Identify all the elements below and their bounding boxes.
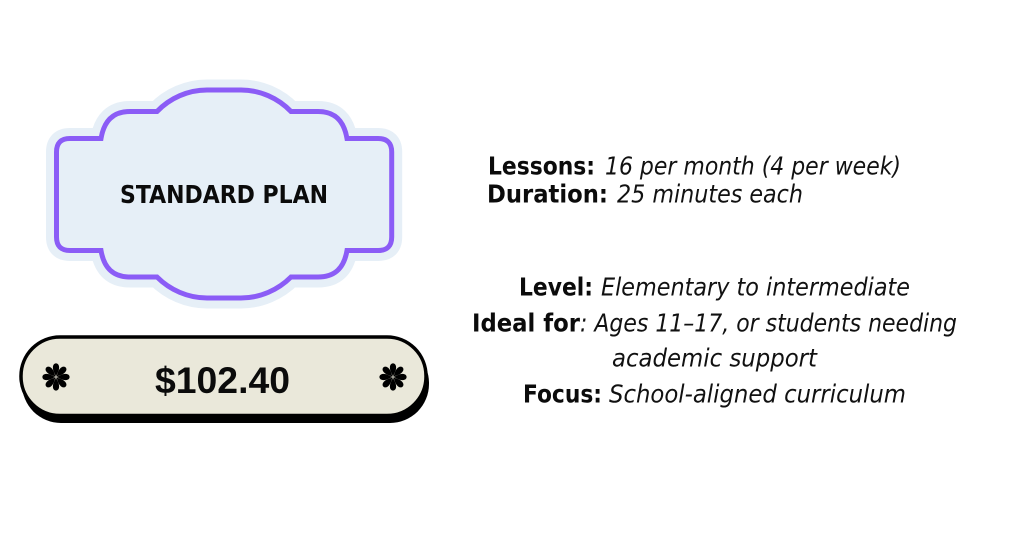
ideal for line: : Ages 11–17, or students needing [580,308,957,338]
price: $102.40 [155,360,290,401]
level line: Elementary to intermediate [601,272,910,302]
lessons line [488,152,901,180]
icon: right flower asterisk [379,363,407,391]
panel: price pill [21,337,429,423]
text block: level, ideal for and focus [472,272,957,408]
lessons line: Lessons: [488,152,595,180]
duration line [487,180,803,208]
panel: plan badge [56,90,392,298]
duration line: Duration: [487,180,608,208]
badge title: STANDARD PLAN [120,180,328,209]
lessons line: 16 per month (4 per week) [605,152,901,180]
focus line: Focus: [523,380,602,408]
badge halo [56,90,392,298]
pill shadow [22,344,429,423]
icon: left flower asterisk [42,363,70,391]
ideal for continuation line: academic support [612,344,818,372]
ideal for line: Ideal for [472,308,581,338]
text block: lessons and duration [487,152,901,208]
badge purple outline [56,90,392,298]
pill body [21,337,426,416]
level line: Level: [519,272,593,302]
duration line: 25 minutes each [617,180,803,208]
focus line: School-aligned curriculum [609,380,906,408]
